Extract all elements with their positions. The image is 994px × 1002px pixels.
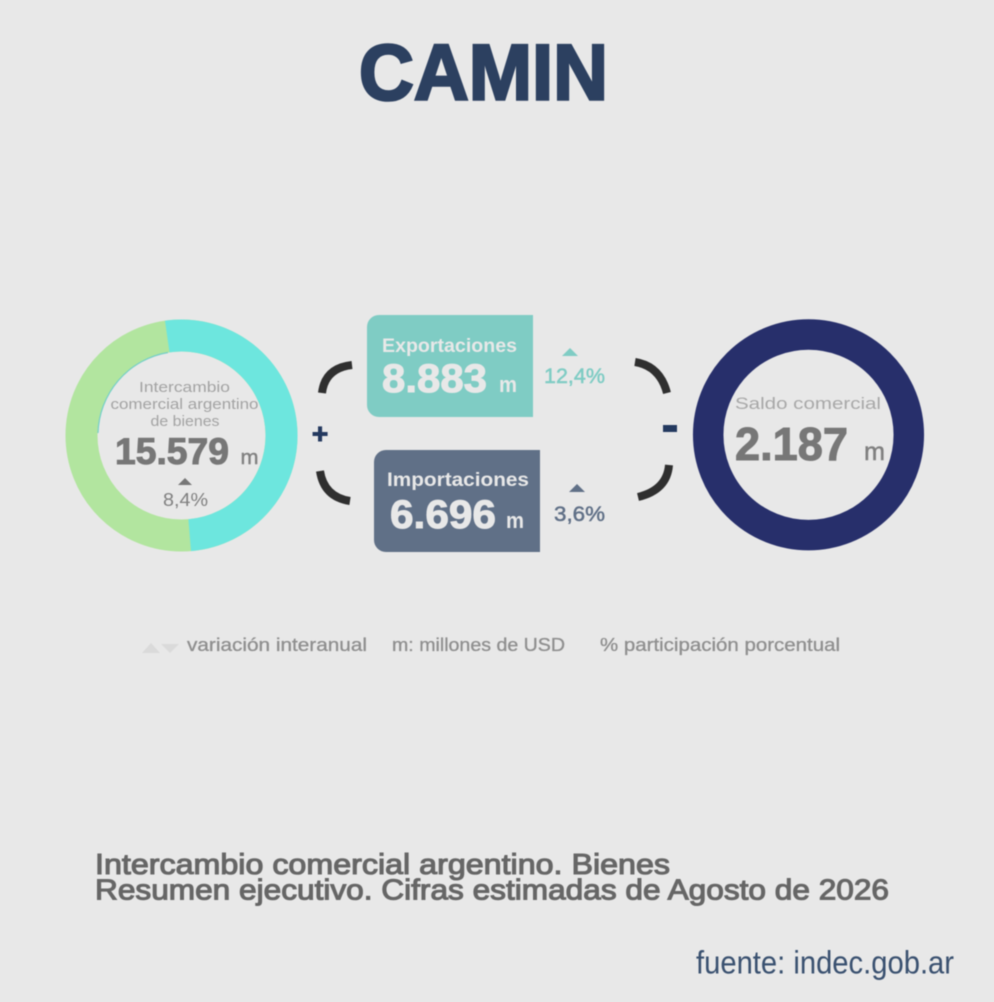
icon: legend triangles (142, 643, 179, 653)
imports value: 6.696 (390, 493, 496, 537)
donut base: green share (82, 336, 282, 536)
imports percent: 3,6% (554, 502, 605, 526)
panel: exports (367, 315, 533, 417)
balance label: Saldo comercial (735, 394, 881, 413)
exports variation (544, 348, 605, 388)
imports box (374, 450, 540, 552)
donut heading: Intercambio (139, 380, 230, 396)
total value: 15.579 (115, 431, 229, 472)
balance unit: m (864, 438, 885, 466)
exports percent: 12,4% (544, 364, 605, 388)
imports unit: m (506, 508, 524, 533)
icon: up triangle (562, 348, 578, 356)
total unit: m (240, 447, 258, 469)
exports unit: m (499, 372, 517, 397)
icon: up triangle (178, 478, 192, 485)
panel: total trade donut (82, 335, 282, 536)
exports value: 8.883 (382, 357, 487, 401)
exports box (367, 315, 533, 417)
icon: up triangle (569, 484, 585, 492)
donut heading: comercial argentino (110, 397, 258, 413)
imports variation (554, 484, 605, 526)
legend text: millions: m: millones de USD (392, 635, 565, 655)
legend (142, 635, 840, 655)
operator: minus (663, 425, 677, 432)
balance value: 2.187 (735, 418, 848, 470)
total variation: 8,4% (163, 489, 208, 510)
left brackets (320, 365, 352, 501)
footer heading: Resumen ejecutivo. Cifras estimadas de Agosto de 2026 (95, 874, 889, 906)
exports label: Exportaciones (382, 336, 517, 357)
footer heading (95, 849, 889, 906)
donut inner edge line (98, 352, 168, 433)
panel: imports (374, 450, 540, 552)
donut ring (708, 334, 909, 535)
imports label: Importaciones (387, 470, 529, 491)
title: CAMIN (359, 28, 608, 116)
legend text: variation: variación interanual (187, 635, 367, 655)
donut heading: de bienes (150, 414, 220, 430)
operator: plus: + (312, 418, 328, 449)
legend text: percent: % participación porcentual (600, 635, 840, 655)
right brackets (635, 362, 669, 497)
donut segment: turquoise share (167, 335, 282, 535)
donut heading (110, 380, 258, 430)
footer heading: Intercambio comercial argentino. Bienes (95, 849, 670, 881)
panel: balance donut (708, 334, 909, 535)
source: fuente: indec.gob.ar (696, 944, 954, 980)
